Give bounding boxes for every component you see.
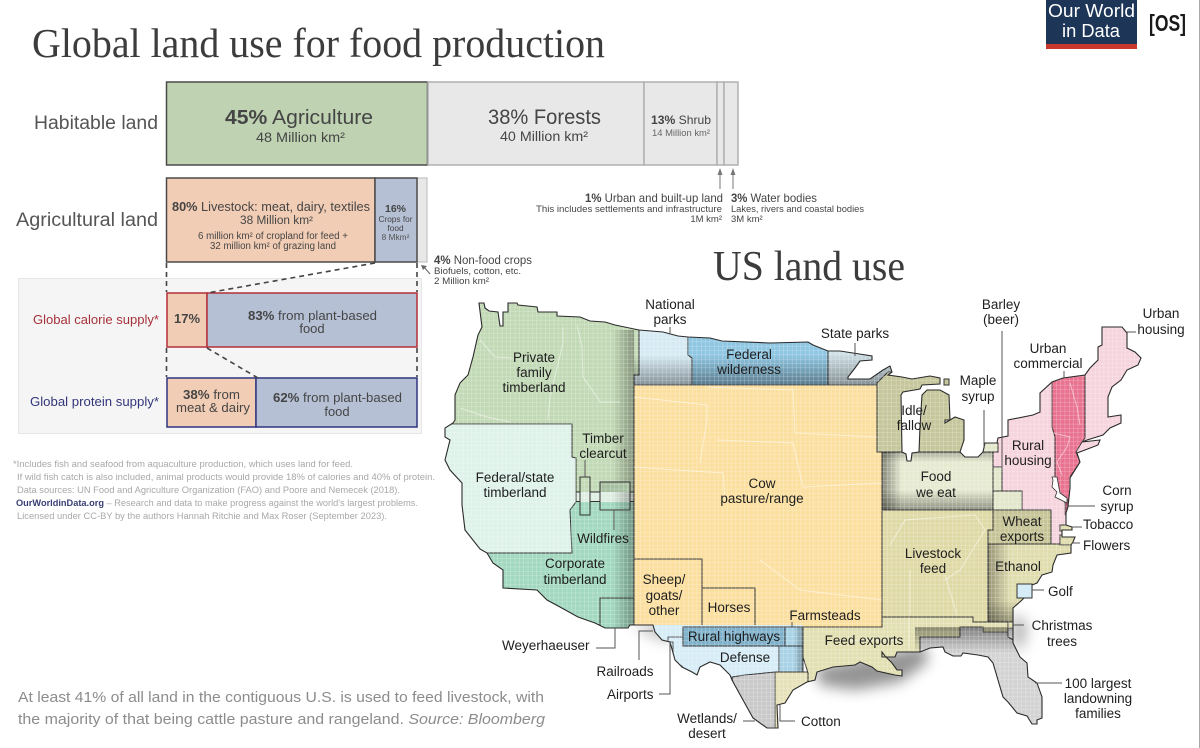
caption: the majority of that being cattle pasture and rangeland. Source: Bloomberg bbox=[18, 711, 546, 728]
segment: shrub bbox=[644, 82, 717, 165]
bar: calorie supply: 17% bbox=[174, 311, 200, 326]
label: rural highways: Rural highways bbox=[688, 629, 780, 644]
label: livestock feed: Livestock bbox=[905, 546, 961, 561]
label: corn syrup bbox=[1100, 483, 1134, 514]
label: weyerhaeuser: Weyerhaeuser bbox=[502, 638, 590, 653]
footnotes: Data sources: UN Food and Agriculture Organization (FAO) and Poore and Nemecek (2018). bbox=[17, 485, 400, 496]
label: sheep/goats/other bbox=[643, 572, 686, 618]
label: national parks: National bbox=[645, 297, 695, 312]
shading beside cow pasture bbox=[615, 330, 634, 628]
region: federal/state timberland bbox=[440, 424, 576, 553]
right edge border bbox=[1199, 0, 1200, 748]
US heading: US land use bbox=[713, 244, 905, 290]
label: flowers: Flowers bbox=[1083, 538, 1131, 553]
label: rural housing bbox=[1004, 438, 1052, 468]
label: 100 largest landowning families: 100 largest bbox=[1065, 676, 1132, 691]
segment: shrub: 14 Million km² bbox=[652, 128, 710, 139]
label: private family timberland bbox=[502, 350, 566, 395]
label: food we eat bbox=[915, 469, 956, 500]
segment: livestock: 6 million km² of cropland for feed + bbox=[198, 231, 348, 242]
label: 100 largest landowning families: landowning bbox=[1064, 691, 1132, 706]
note: urban and built-up land bbox=[536, 191, 723, 225]
label: barley bbox=[982, 297, 1020, 327]
segment: urban bbox=[717, 82, 724, 165]
label: cow pasture/range: Cow bbox=[748, 476, 776, 491]
label: christmas trees: trees bbox=[1047, 634, 1077, 649]
segment: crops for food: Crops for bbox=[378, 214, 413, 224]
label: maple syrup: syrup bbox=[961, 389, 995, 404]
label: idle/fallow bbox=[897, 403, 932, 433]
segment: water bbox=[724, 82, 738, 165]
label: maple syrup: Maple bbox=[960, 373, 996, 388]
label: cow pasture/range bbox=[720, 476, 804, 506]
label: corporate timberland: Corporate bbox=[545, 556, 605, 571]
label: timber clearcut: clearcut bbox=[579, 446, 627, 461]
bar: protein supply: food bbox=[324, 404, 350, 419]
region: corporate timberland bbox=[488, 502, 634, 624]
note: water bodies: 3M km² bbox=[731, 214, 763, 225]
region: idle/fallow bbox=[876, 372, 964, 452]
label: urban commercial: commercial bbox=[1013, 356, 1083, 371]
region: food we eat bbox=[882, 452, 993, 510]
note: urban and built-up land: 1% Urban and built-up land bbox=[585, 191, 723, 205]
label: federal wilderness: Federal bbox=[726, 347, 772, 362]
label: rural housing: housing bbox=[1004, 453, 1052, 468]
region: tobacco and flowers bbox=[1060, 525, 1076, 545]
bar: protein supply bbox=[167, 378, 417, 427]
region: barley and pale strips bbox=[984, 442, 1022, 510]
logo: Our World in Data bbox=[1046, 0, 1137, 49]
label: wheat exports: exports bbox=[1000, 529, 1044, 544]
segment: crops for food: 16% bbox=[385, 203, 407, 215]
region: weyerhaeuser bbox=[600, 598, 634, 626]
US map bbox=[444, 302, 1142, 728]
segment: forests bbox=[428, 82, 644, 165]
region: mid-blue strip bbox=[786, 626, 802, 646]
bar: calorie supply: food bbox=[299, 321, 325, 336]
label: food we eat: Food bbox=[921, 469, 951, 484]
label: cow pasture/range: pasture/range bbox=[720, 491, 804, 506]
label: sheep/goats/other: Sheep/ bbox=[643, 572, 686, 587]
segment: livestock: 38 Million km² bbox=[240, 215, 313, 227]
region: national parks bbox=[634, 330, 692, 384]
label: sheep/goats/other: other bbox=[649, 603, 680, 618]
segment: livestock: 32 million km² of grazing land bbox=[210, 241, 336, 252]
white coastal gap bbox=[1052, 477, 1067, 503]
note: non-food crops: 4% Non-food crops bbox=[434, 255, 532, 267]
label: federal wilderness bbox=[716, 347, 781, 377]
segment: agriculture bbox=[166, 82, 428, 165]
golf square bbox=[1017, 584, 1032, 598]
region: cow pasture bbox=[634, 385, 882, 627]
segment: crops for food bbox=[375, 178, 417, 262]
region: urban commercial bbox=[1052, 372, 1085, 507]
bar: calorie supply bbox=[167, 293, 417, 347]
isle royale bbox=[944, 379, 949, 385]
label: national parks: parks bbox=[653, 312, 687, 327]
label: private family timberland: Private bbox=[513, 350, 555, 365]
region: horses bbox=[702, 588, 755, 627]
arrow: urban bbox=[718, 168, 722, 189]
label: urban commercial bbox=[1013, 341, 1083, 371]
caption bbox=[18, 689, 546, 728]
label: wetlands/desert: Wetlands/ bbox=[677, 711, 737, 726]
label: airports: Airports bbox=[607, 687, 654, 702]
region: wetlands bbox=[732, 672, 775, 730]
footnotes: OurWorldinData.org – Research and data to make progress against the world's largest problems. bbox=[16, 498, 418, 509]
segment: forests: 38% Forests bbox=[488, 106, 601, 129]
label: food we eat: we eat bbox=[915, 485, 956, 500]
region: wildfire shading bbox=[600, 482, 630, 492]
state lines bbox=[460, 325, 1080, 650]
note: non-food crops bbox=[434, 255, 532, 287]
label: urban housing bbox=[1137, 306, 1185, 337]
region: feed exports bbox=[802, 618, 1008, 682]
label: corn syrup: Corn bbox=[1102, 483, 1132, 498]
logo: Our World in Data: in Data bbox=[1062, 21, 1121, 41]
logo: Our World in Data: Our World bbox=[1048, 1, 1135, 21]
row: habitable land bbox=[34, 82, 738, 165]
region: sheep bbox=[634, 558, 702, 588]
label: global protein supply: Global protein supply* bbox=[30, 394, 159, 409]
segment: livestock bbox=[166, 178, 375, 262]
inner box: timber clearcut bbox=[580, 477, 590, 515]
label: railroads: Railroads bbox=[596, 664, 654, 679]
panel: global supply bbox=[18, 278, 422, 434]
label: farmsteads: Farmsteads bbox=[789, 608, 861, 623]
label: rural housing: Rural bbox=[1012, 438, 1044, 453]
note: water bodies bbox=[731, 191, 864, 225]
dashed connectors bbox=[166, 263, 417, 378]
label: idle/fallow: fallow bbox=[897, 418, 932, 433]
map labels bbox=[476, 297, 1185, 741]
title: Global land use for food production bbox=[32, 20, 605, 66]
label: 100 largest landowning families: families bbox=[1075, 706, 1121, 721]
label: wetlands/desert bbox=[677, 711, 737, 741]
region: railroads inner bbox=[668, 637, 683, 667]
segment: crops for food: food bbox=[387, 223, 404, 233]
segment: agriculture: 45% Agriculture bbox=[225, 107, 373, 129]
bar: calorie supply: 83% from plant-based bbox=[248, 308, 377, 323]
label: maple syrup bbox=[960, 373, 996, 404]
label: barley: Barley bbox=[982, 297, 1020, 312]
logo: OS: [OS] bbox=[1149, 10, 1186, 36]
label: wheat exports: Wheat bbox=[1002, 514, 1042, 529]
inner box: wildfires bbox=[600, 482, 630, 510]
region: state parks bbox=[828, 352, 892, 384]
label: wheat exports bbox=[1000, 514, 1044, 544]
note: urban and built-up land: 1M km² bbox=[690, 214, 722, 225]
region: private family timberland bbox=[453, 304, 638, 492]
label: federal/state timberland bbox=[476, 470, 554, 500]
map shadows bbox=[632, 612, 1028, 690]
region: cotton bbox=[774, 672, 808, 728]
label: global calorie supply: Global calorie supply* bbox=[33, 312, 159, 327]
label: tobacco: Tobacco bbox=[1083, 517, 1133, 532]
label: defense: Defense bbox=[720, 650, 770, 665]
region: federal wilderness bbox=[688, 338, 828, 384]
label: national parks bbox=[645, 297, 695, 327]
label: federal/state timberland: Federal/state bbox=[476, 470, 554, 485]
arrow: water bbox=[730, 168, 736, 189]
caption: At least 41% of all land in the contiguous U.S. is used to feed livestock, with bbox=[18, 689, 544, 706]
label: corporate timberland: timberland bbox=[543, 572, 607, 587]
label: ethanol: Ethanol bbox=[995, 559, 1041, 574]
label: horses: Horses bbox=[708, 600, 751, 615]
footnotes: *Includes fish and seafood from aquaculture production, which uses land for feed. bbox=[13, 459, 353, 470]
segment: crops for food: 8 Mkm² bbox=[382, 232, 410, 242]
note: water bodies: 3% Water bodies bbox=[731, 191, 817, 205]
label: private family timberland: timberland bbox=[502, 380, 566, 395]
label: state parks: State parks bbox=[821, 326, 889, 341]
footnotes: If wild fish catch is also included, animal products would provide 18% of calories and 40% of protein. bbox=[17, 472, 435, 483]
row: agricultural land bbox=[16, 178, 427, 262]
label: federal wilderness: wilderness bbox=[716, 362, 781, 377]
bar: protein supply: meat & dairy bbox=[176, 400, 250, 415]
region: band between timberlands bbox=[576, 492, 636, 502]
segment: shrub: 13% Shrub bbox=[651, 113, 711, 127]
region: wheat exports bbox=[988, 510, 1051, 544]
label: golf: Golf bbox=[1048, 584, 1073, 599]
region: 100 largest bbox=[915, 627, 1042, 724]
strip shading bbox=[795, 627, 803, 672]
label: christmas trees: Christmas bbox=[1032, 618, 1093, 633]
label: corn syrup: syrup bbox=[1100, 499, 1134, 514]
leader lines bbox=[585, 327, 1136, 721]
segment: agriculture: 48 Million km² bbox=[256, 130, 346, 145]
note: urban and built-up land: This includes settlements and infrastructure bbox=[536, 204, 722, 215]
label: 100 largest landowning families bbox=[1064, 676, 1132, 721]
label: federal/state timberland: timberland bbox=[483, 485, 547, 500]
label: habitable land: Habitable land bbox=[34, 113, 158, 134]
label: wetlands/desert: desert bbox=[688, 726, 726, 741]
note: non-food crops: Biofuels, cotton, etc. bbox=[434, 266, 521, 277]
label: sheep/goats/other: goats/ bbox=[646, 588, 683, 603]
note: non-food crops: 2 Million km² bbox=[434, 276, 489, 287]
bar: protein supply: 62% from plant-based bbox=[273, 390, 402, 405]
label: livestock feed: feed bbox=[920, 561, 946, 576]
note: water bodies: Lakes, rivers and coastal bodies bbox=[731, 204, 864, 215]
label: urban commercial: Urban bbox=[1030, 341, 1066, 356]
grid texture bbox=[446, 304, 1140, 728]
label: agricultural land: Agricultural land bbox=[16, 210, 158, 231]
label: corporate timberland bbox=[543, 556, 607, 587]
region: livestock feed bbox=[882, 510, 993, 622]
label: urban housing: housing bbox=[1137, 322, 1185, 337]
label: barley: (beer) bbox=[983, 312, 1019, 327]
label: idle/fallow: Idle/ bbox=[901, 403, 927, 418]
region: christmas trees bbox=[1008, 622, 1013, 628]
footnotes bbox=[13, 459, 435, 522]
segment: forests: 40 Million km² bbox=[500, 129, 589, 144]
region: rural/coastal blue bbox=[650, 625, 803, 680]
label: private family timberland: family bbox=[516, 365, 552, 380]
segment: livestock: 80% Livestock: meat, dairy, textiles bbox=[172, 200, 370, 214]
map outline bbox=[445, 303, 1141, 728]
band lines bbox=[576, 492, 634, 502]
label: timber clearcut: Timber bbox=[582, 431, 624, 446]
label: christmas trees bbox=[1032, 618, 1093, 649]
region: ethanol bbox=[988, 544, 1078, 622]
footnotes: Licensed under CC-BY by the authors Hannah Ritchie and Max Roser (September 2023). bbox=[17, 511, 387, 522]
label: timber clearcut bbox=[579, 431, 627, 461]
label: cotton: Cotton bbox=[801, 714, 841, 729]
segment: non-food crops bbox=[417, 178, 427, 262]
bar: protein supply: 38% from bbox=[183, 387, 240, 402]
label: feed exports: Feed exports bbox=[825, 633, 904, 648]
label: wildfires: Wildfires bbox=[577, 531, 629, 546]
region: housing bbox=[994, 328, 1140, 544]
region: rural highways bbox=[683, 627, 785, 646]
label: livestock feed bbox=[905, 546, 961, 576]
label: urban housing: Urban bbox=[1143, 306, 1179, 321]
region: corn syrup bbox=[1065, 500, 1068, 515]
arrow: non-food crops bbox=[421, 265, 430, 274]
